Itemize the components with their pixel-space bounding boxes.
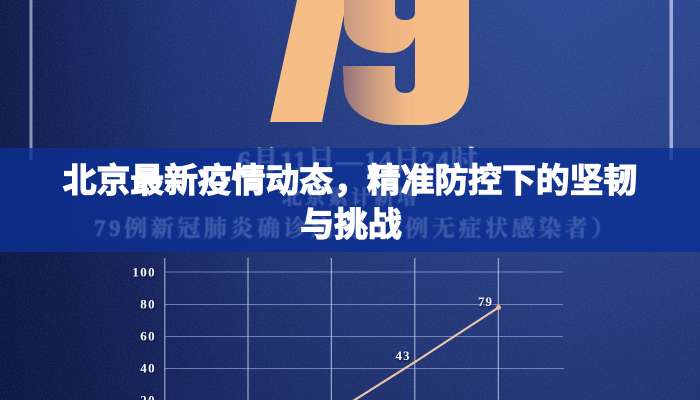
title: 北京最新疫情动态，精准防控下的坚韧 bbox=[63, 162, 637, 200]
case count: 79例新冠肺炎确诊病例（7例无症状感染者） bbox=[94, 215, 618, 241]
y axis labels: 60 bbox=[140, 328, 156, 344]
digit 9 bbox=[343, 0, 469, 125]
digit 7 bbox=[270, 0, 347, 122]
big number 79 bbox=[270, 0, 469, 125]
data line bbox=[353, 308, 498, 400]
value 43: 43 bbox=[396, 348, 410, 363]
cumulative label: 北京累计新增 bbox=[282, 186, 420, 209]
y axis labels bbox=[132, 264, 156, 400]
y axis labels: 100 bbox=[132, 264, 156, 280]
title banner bbox=[0, 148, 700, 252]
title bbox=[63, 162, 637, 244]
value 79: 79 bbox=[478, 294, 493, 309]
horizontal grid lines bbox=[165, 272, 564, 368]
frame lines bbox=[30, 0, 673, 160]
y axis labels: 40 bbox=[140, 360, 156, 376]
y axis labels: 80 bbox=[140, 296, 156, 312]
subtitle behind banner bbox=[94, 146, 618, 241]
line chart bbox=[132, 258, 564, 400]
title: 与挑战 bbox=[300, 206, 402, 244]
end point bbox=[496, 305, 501, 310]
date range: 6月11日—14日24时 bbox=[237, 146, 479, 176]
vertical grid lines bbox=[165, 258, 498, 400]
